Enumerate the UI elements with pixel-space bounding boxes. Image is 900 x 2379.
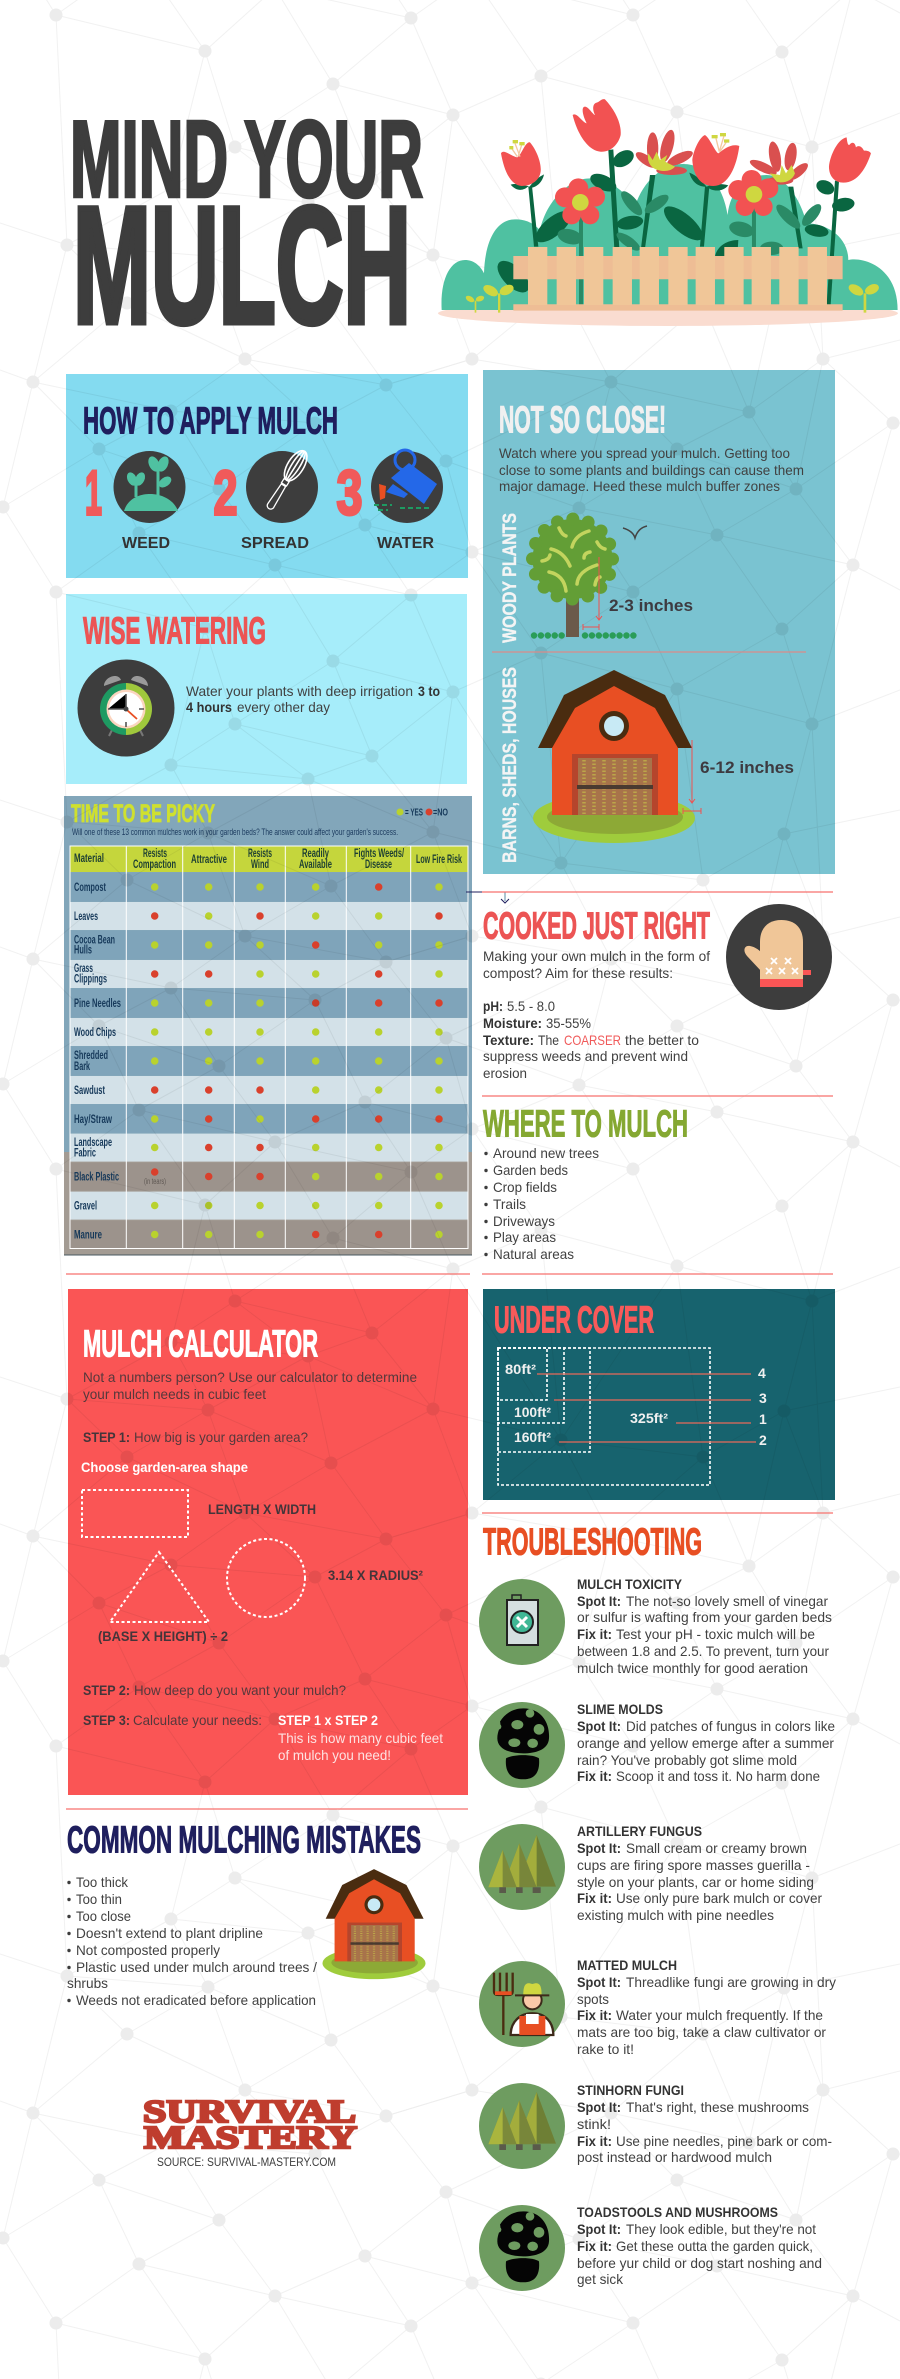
item: stinhorn fungi: STINHORN FUNGI [577,2082,684,2098]
row: landscape fabric: Landscape [74,1135,112,1149]
label: woody plants: WOODY PLANTS [500,513,521,643]
row: sawdust: Sawdust [74,1083,105,1097]
list: where to mulch: Driveways [493,1213,555,1229]
table title: TIME TO BE PICKY [71,800,215,828]
list: mulching mistakes: Too close [76,1908,131,1924]
item: mulch toxicity [479,1576,832,1676]
list: where to mulch: Crop fields [493,1179,557,1195]
row: pine needles: Pine Needles [74,996,121,1010]
panel: how to apply mulch [66,374,468,578]
row: manure: Manure [74,1228,102,1242]
list: mulching mistakes: Doesn't extend to plant dripline [76,1925,263,1941]
step 3: Calculate your needs: [133,1712,262,1728]
text: compost targets: erosion [483,1065,527,1081]
icon: barn [533,670,695,843]
icon: small barn [322,1869,426,1979]
row: cocoa bean hulls: Hulls [74,942,92,956]
table header row: Attractive [191,854,227,866]
text: compost targets: The [538,1032,559,1048]
table header row: Compaction [133,859,176,871]
step 2: spread: 2 [214,458,238,528]
text: compost targets: 5.5 - 8.0 [507,998,555,1014]
row: shredded bark: Bark [74,1059,90,1073]
list: mulching mistakes: Too thick [76,1874,129,1890]
panel: under cover [483,1289,835,1500]
diagram: coverage areas: 1 [759,1411,767,1427]
heading: common mulching mistakes: COMMON MULCHING MISTAKES [67,1820,421,1862]
table header row: Resists [248,848,272,860]
step 1: STEP 1: [83,1429,130,1445]
step 3: STEP 3: [83,1712,130,1728]
label: spread: SPREAD [241,535,309,552]
step 2: STEP 2: [83,1682,130,1698]
step 1: weed: 1 [85,458,102,528]
title: MIND YOUR [70,98,423,220]
text: watering advice: every other day [237,699,330,715]
list: mulching mistakes: Not composted properly [76,1942,220,1958]
row: wood chips [70,1018,468,1046]
text: calculator intro: Not a numbers person? Use our calculator to determine [83,1369,417,1385]
title: MULCH [73,174,411,358]
item: matted mulch: rake to it! [577,2041,634,2057]
text: watering advice: 3 to [418,683,440,699]
step 2: How deep do you want your mulch? [134,1682,346,1698]
table header row: Resists [143,848,167,860]
row: black plastic: (in tears) [144,1176,166,1186]
legend: =NO [433,808,448,818]
shape: circle [227,1539,423,1617]
item: toadstools and mushrooms: Spot It: [577,2221,621,2237]
row: leaves: Leaves [74,909,98,923]
item: artillery fungus: ARTILLERY FUNGUS [577,1823,702,1839]
heading: under cover: UNDER COVER [494,1300,654,1342]
item: toadstools and mushrooms: TOADSTOOLS AND MUSHROOMS [577,2204,778,2220]
item: slime molds: SLIME MOLDS [577,1701,663,1717]
label: weed: WEED [122,535,170,552]
item: mulch toxicity: or sulfur is wafting from your garden beds [577,1609,832,1625]
list: where to mulch: Trails [493,1196,526,1212]
item: stinhorn fungi: Use pine needles, pine bark or com- [616,2133,832,2149]
text: compost targets [483,948,710,1081]
text: compost targets: Making your own mulch in the form of [483,948,710,964]
row: gravel [70,1192,468,1220]
item: stinhorn fungi: post instead or hardwood mulch [577,2149,772,2165]
text: compost targets: the better to [625,1032,699,1048]
panel: not so close [483,370,835,874]
source line: SOURCE: SURVIVAL-MASTERY.COM [157,2157,336,2169]
table header row: Disease [365,859,392,871]
item: slime molds: Fix it: [577,1768,612,1784]
item: slime molds: Did patches of fungus in colors like [626,1718,835,1734]
arrow: 2-3 inches buffer [583,557,602,630]
item: matted mulch [479,1957,836,2057]
row: wood chips: Wood Chips [74,1025,116,1039]
heading: wise watering: WISE WATERING [83,610,266,652]
row: hay/straw: Hay/Straw [74,1112,112,1126]
arrow: 6-12 inches buffer [683,740,701,814]
item: matted mulch: Spot It: [577,1974,621,1990]
list: where to mulch: Garden beds [493,1162,568,1178]
item: stinhorn fungi: That's right, these mushrooms [626,2099,809,2115]
heading: troubleshooting: TROUBLESHOOTING [483,1522,702,1564]
diagram: coverage areas [498,1348,767,1485]
list: where to mulch: Play areas [493,1229,556,1245]
row: grass clippings: Clippings [74,972,107,986]
table header row: Readily [302,848,329,860]
text: compost targets: Moisture: [483,1015,542,1031]
item: slime molds: rain? You've probably got slime mold [577,1752,797,1768]
step 3: water: 3 [336,458,362,528]
panel: wise watering [66,594,467,784]
item: matted mulch: mats are too big, take a claw cultivator or [577,2024,826,2040]
item: stinhorn fungi: stink! [577,2116,611,2132]
ground dots [534,632,638,639]
item: artillery fungus: cups are firing spore masses guerilla - [577,1857,810,1873]
item: mulch toxicity: Test your pH - toxic mulch will be [616,1626,815,1642]
item: matted mulch: Fix it: [577,2007,612,2023]
row: black plastic [70,1163,468,1191]
item: toadstools and mushrooms: get sick [577,2271,624,2287]
heading: mulch calculator: MULCH CALCULATOR [83,1324,318,1366]
table subtitle: Will one of these 13 common mulches work in your garden beds? The answer could affect your garden's success. [72,827,398,838]
step 1: How big is your garden area? [134,1429,308,1445]
diagram: coverage areas: 160ft² [514,1429,551,1445]
row: black plastic: Black Plastic [74,1170,119,1184]
step 1: Choose garden-area shape [81,1459,248,1475]
heading: how to apply mulch: HOW TO APPLY MULCH [83,400,338,442]
item: artillery fungus [479,1823,822,1923]
list: mulching mistakes: Too thin [76,1891,122,1907]
icon: tree [532,519,647,637]
table header row: Wind [251,859,269,871]
item: toadstools and mushrooms: before yur child or dog start noshing and [577,2255,822,2271]
shape: rectangle: LENGTH X WIDTH [208,1501,316,1517]
text: watering advice: Water your plants with deep irrigation [186,683,413,699]
heading: where to mulch: WHERE TO MULCH [483,1104,688,1146]
diagram: coverage areas: 3 [759,1390,767,1406]
table header row: Low Fire Risk [416,854,462,866]
legend: = YES [405,808,423,818]
icon: alarm clock [78,660,174,756]
shape: triangle: (BASE X HEIGHT) ÷ 2 [98,1628,228,1644]
logo: survival mastery: SURVIVAL [143,2093,356,2129]
text: compost targets: pH: [483,998,503,1014]
item: mulch toxicity: MULCH TOXICITY [577,1576,683,1592]
step 1: weed [85,451,186,552]
logo: survival mastery: MASTERY [144,2119,357,2155]
heading: not so close: NOT SO CLOSE! [499,400,666,442]
row: grass clippings [70,960,468,988]
item: slime molds: Scoop it and toss it. No harm done [616,1768,820,1784]
label: barns sheds houses: BARNS, SHEDS, HOUSES [500,667,521,863]
list: mulching mistakes: Plastic used under mulch around trees / [76,1959,317,1975]
row: grass clippings: Grass [74,961,93,975]
heading: cooked just right: COOKED JUST RIGHT [483,906,710,948]
text: compost targets: Texture: [483,1032,534,1048]
row: compost: Compost [74,880,106,894]
item: slime molds: Spot It: [577,1718,621,1734]
shape: circle: 3.14 X RADIUS² [328,1567,423,1583]
illustration: flowers behind a fence [438,99,898,326]
item: stinhorn fungi: Fix it: [577,2133,612,2149]
item: stinhorn fungi: Spot It: [577,2099,621,2115]
text: calculator intro: your mulch needs in cubic feet [83,1386,266,1402]
item: artillery fungus: Small cream or creamy brown [626,1840,807,1856]
text: watering advice [186,683,440,715]
row: leaves [70,902,468,930]
icon: bird [623,526,647,538]
list: mulching mistakes: shrubs [67,1975,108,1991]
row: shredded bark [70,1047,468,1075]
item: artillery fungus: existing mulch with pine needles [577,1907,774,1923]
row: cocoa bean hulls: Cocoa Bean [74,932,115,946]
text: calculator intro [83,1369,417,1402]
item: artillery fungus: Use only pure bark mulch or cover [616,1890,822,1906]
text: buffer zone intro: major damage. Heed these mulch buffer zones [499,478,780,494]
row: landscape fabric: Fabric [74,1146,96,1160]
item: artillery fungus: Spot It: [577,1840,621,1856]
title [70,98,423,358]
measurement: 2-3 inches: 2-3 inches [609,596,693,615]
item: mulch toxicity: Spot It: [577,1593,621,1609]
step 3: water [336,450,443,552]
table header row: Material [74,853,104,865]
step 3: STEP 1 x STEP 2 [278,1712,378,1728]
table header row: Fights Weeds/ [354,848,405,860]
text: compost targets: 35-55% [546,1015,591,1031]
item: toadstools and mushrooms: Get these outta the garden quick, [616,2238,813,2254]
row: manure [70,1221,468,1249]
text: compost targets: compost? Aim for these results: [483,965,673,981]
list: where to mulch [486,1145,599,1262]
step 3 [83,1712,443,1763]
item: stinhorn fungi [479,2082,832,2169]
item: matted mulch: Water your mulch frequently. If the [616,2007,823,2023]
icon: oven mitt [726,904,832,1010]
item: slime molds [479,1701,835,1788]
table header row [74,848,462,871]
panel: mulch calculator [68,1289,468,1795]
item: matted mulch: spots [577,1991,609,2007]
row: hay/straw [70,1105,468,1133]
diagram: coverage areas: 4 [758,1365,766,1381]
item: mulch toxicity: Fix it: [577,1626,612,1642]
item: toadstools and mushrooms: They look edible, but they're not [626,2221,816,2237]
item: toadstools and mushrooms [479,2204,822,2291]
logo: survival mastery [143,2093,357,2155]
list: where to mulch: Around new trees [493,1145,599,1161]
diagram: coverage areas: 100ft² [514,1404,551,1420]
diagram: coverage areas: 80ft² [505,1361,536,1377]
shape: rectangle [82,1490,316,1537]
step 1 [81,1429,308,1475]
item: mulch toxicity: The not-so lovely smell of vinegar [626,1593,828,1609]
row: cocoa bean hulls [70,931,468,959]
row: landscape fabric [70,1134,468,1162]
text: buffer zone intro: Watch where you spread your mulch. Getting too [499,445,790,461]
row: shredded bark: Shredded [74,1048,108,1062]
item: mulch toxicity: between 1.8 and 2.5. To prevent, turn your [577,1643,829,1659]
measurement: 6-12 inches: 6-12 inches [700,758,794,777]
table header row: Available [299,859,332,871]
item: matted mulch: MATTED MULCH [577,1957,677,1973]
text: compost targets: suppress weeds and prevent wind [483,1048,688,1064]
item: artillery fungus: Fix it: [577,1890,612,1906]
row: sawdust [70,1076,468,1104]
diagram: coverage areas: 325ft² [630,1410,668,1426]
arrow: table to cooked just right [466,892,509,903]
item: slime molds: orange and yellow emerge after a summer [577,1735,834,1751]
list: mulching mistakes [67,1874,317,2008]
shape: triangle [98,1552,228,1644]
step 3: This is how many cubic feet [278,1730,443,1746]
list: where to mulch: Natural areas [493,1246,574,1262]
row: gravel: Gravel [74,1198,97,1212]
row: compost [70,873,468,901]
text: watering advice: 4 hours [186,699,232,715]
legend [400,808,448,818]
label: water: WATER [377,535,434,552]
item: toadstools and mushrooms: Fix it: [577,2238,612,2254]
text: buffer zone intro [499,445,804,494]
text: buffer zone intro: close to some plants and buildings can cause them [499,462,804,478]
item: matted mulch: Threadlike fungi are growing in dry [626,1974,836,1990]
item: artillery fungus: style on your plants, car or home siding [577,1874,814,1890]
network overlay showing through panels [64,370,835,1795]
list: mulching mistakes: Weeds not eradicated before application [76,1992,316,2008]
text: compost targets: COARSER [564,1032,621,1048]
step 3: of mulch you need! [278,1747,391,1763]
table: time to be picky [64,796,472,1255]
step 2: spread [214,447,318,552]
row: pine needles [70,989,468,1017]
item: mulch toxicity: mulch twice monthly for good aeration [577,1660,808,1676]
diagram: coverage areas: 2 [759,1432,767,1448]
